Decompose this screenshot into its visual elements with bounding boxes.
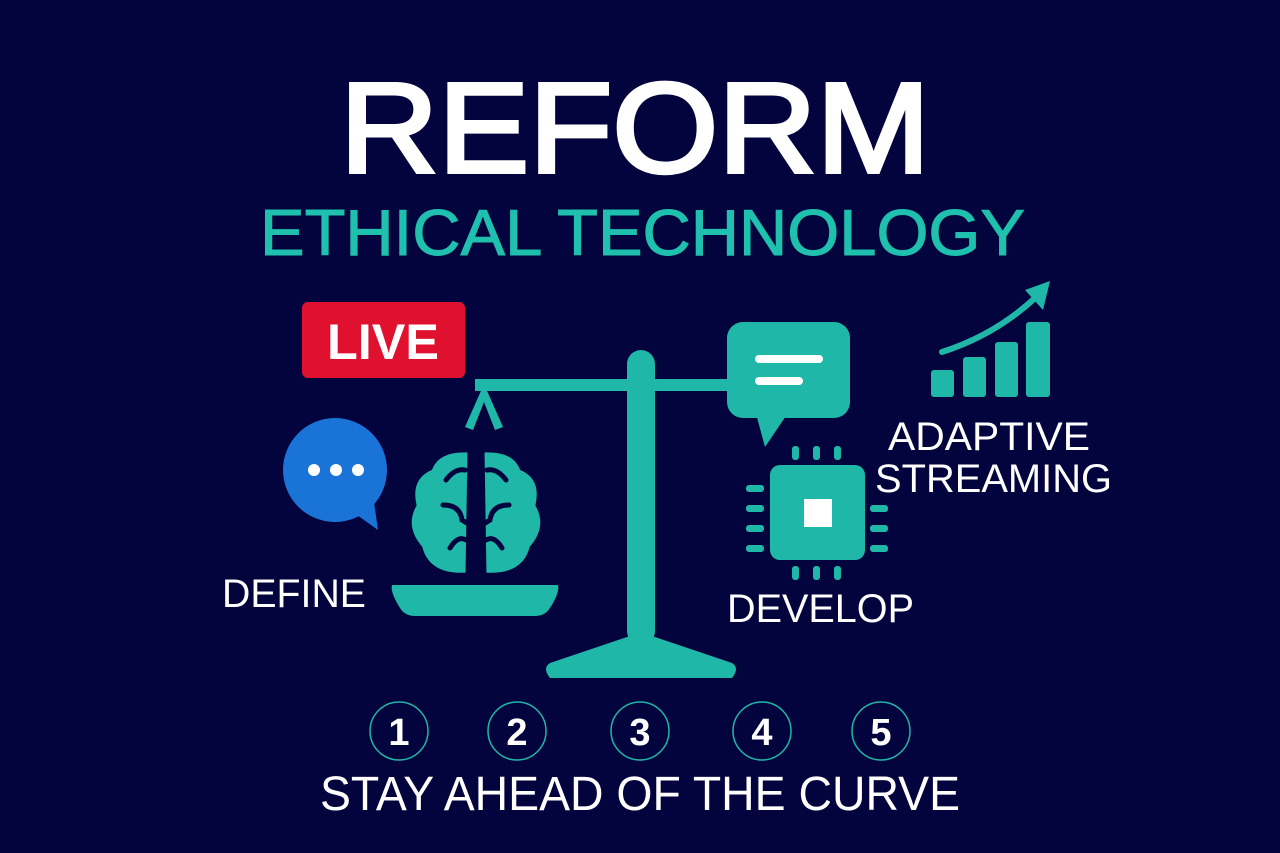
step numbers [388,712,892,754]
step numbers: 2 [506,712,528,754]
icon: blue chat bubble [283,418,387,530]
step numbers: 4 [751,712,773,754]
label: define: DEFINE [222,572,366,616]
live badge: LIVE [327,314,439,370]
step numbers: 5 [870,712,892,754]
label: adaptive streaming: ADAPTIVE [888,415,1090,459]
label: develop: DEVELOP [727,587,914,631]
tagline: STAY AHEAD OF THE CURVE [320,768,960,821]
label: adaptive streaming [875,415,1112,501]
label: adaptive streaming: STREAMING [875,457,1112,501]
step numbers: 1 [388,712,410,754]
live badge [302,302,465,378]
icon: chip [746,446,888,580]
icon: bar chart with arrow [931,281,1050,397]
title: REFORM [340,57,930,200]
icon: teal speech bubble [727,322,850,447]
scale [392,350,736,678]
numbered steps [370,702,910,760]
step numbers: 3 [629,712,651,754]
subtitle: ETHICAL TECHNOLOGY [260,196,1025,269]
icon: brain [409,450,543,575]
